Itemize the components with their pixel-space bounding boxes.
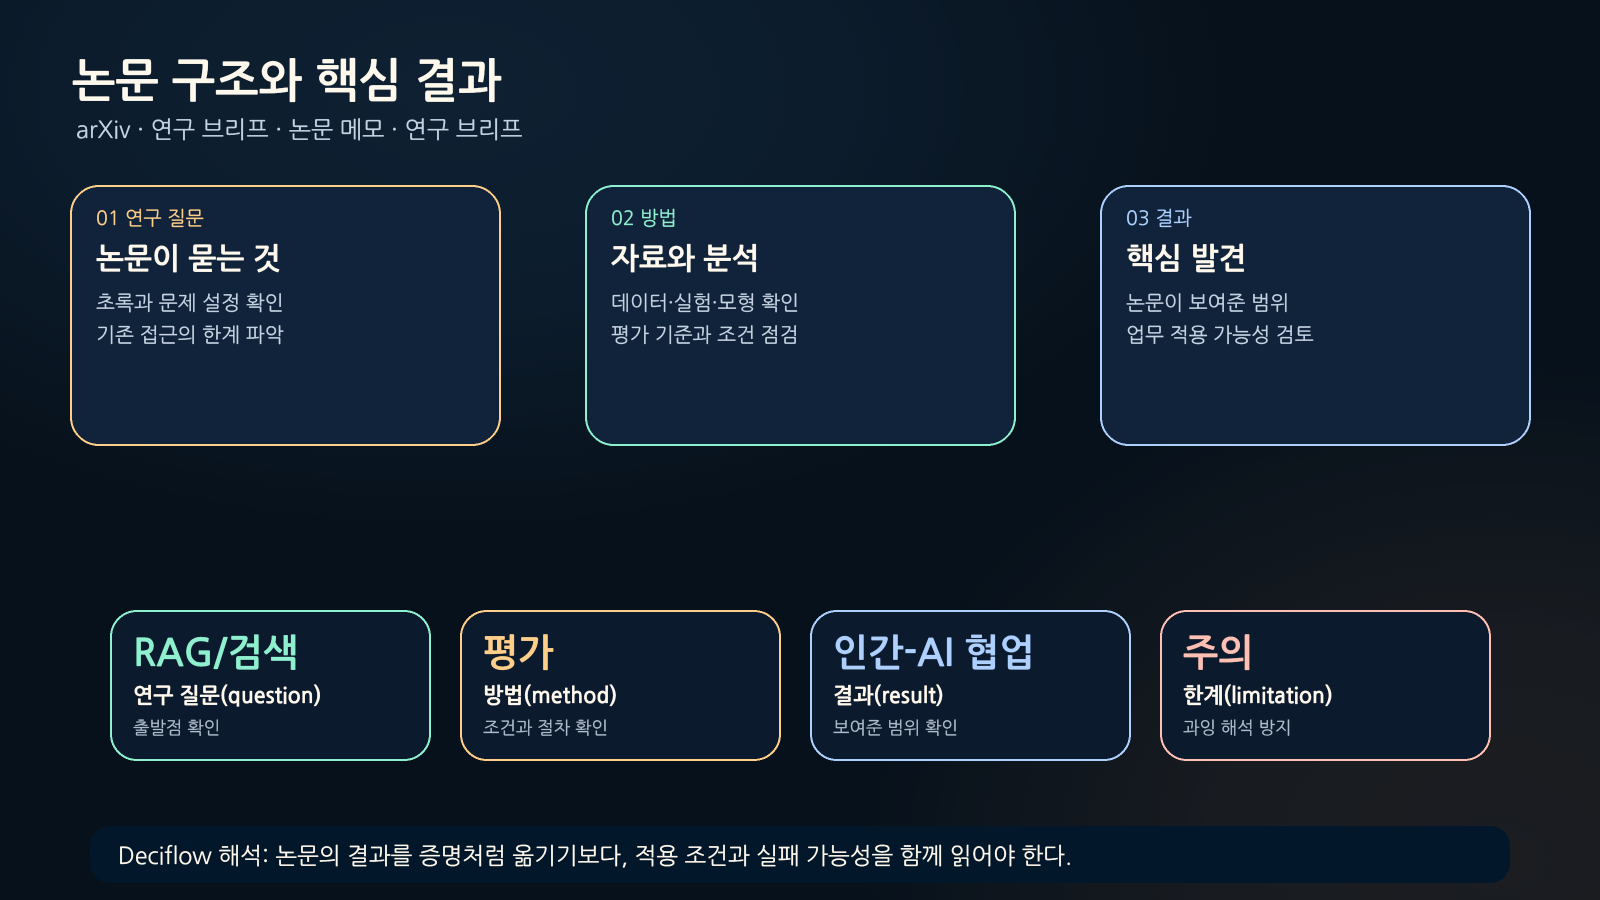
panel text: 업무 적용 가능성 검토 — [1126, 325, 1314, 345]
panel heading: 논문이 묻는 것 — [96, 245, 281, 274]
card heading: 평가 — [483, 634, 554, 672]
card note: 과잉 해석 방지 — [1183, 719, 1292, 737]
title: 논문 구조와 핵심 결과 — [72, 58, 502, 104]
card subheading: 연구 질문(question) — [133, 686, 321, 707]
panel text — [96, 293, 284, 345]
panel text: 기존 접근의 한계 파악 — [96, 325, 284, 345]
panel heading: 핵심 발견 — [1126, 245, 1246, 274]
card: evaluation — [460, 610, 781, 761]
panel label: 01 연구 질문 — [96, 208, 204, 228]
panel text — [611, 293, 799, 345]
card subheading: 결과(result) — [833, 686, 944, 707]
footer text: Deciflow 해석: 논문의 결과를 증명처럼 옮기기보다, 적용 조건과 실패 가능성을 함께 읽어야 한다. — [118, 845, 1072, 868]
card heading: 주의 — [1183, 634, 1254, 672]
panel label: 02 방법 — [611, 208, 677, 228]
panel text: 초록과 문제 설정 확인 — [96, 293, 284, 313]
panel text: 평가 기준과 조건 점검 — [611, 325, 799, 345]
panel text — [1126, 293, 1314, 345]
panel: research question — [70, 185, 501, 446]
card heading: 인간-AI 협업 — [833, 634, 1034, 672]
card subheading: 한계(limitation) — [1183, 686, 1333, 707]
panel label: 03 결과 — [1126, 208, 1192, 228]
subtitle: arXiv · 연구 브리프 · 논문 메모 · 연구 브리프 — [76, 119, 523, 142]
panel: result — [1100, 185, 1531, 446]
card subheading: 방법(method) — [483, 686, 617, 707]
panel: method — [585, 185, 1016, 446]
card heading: RAG/검색 — [133, 634, 298, 672]
card: RAG/search — [110, 610, 431, 761]
card: caution — [1160, 610, 1491, 761]
card note: 출발점 확인 — [133, 719, 220, 737]
card note: 조건과 절차 확인 — [483, 719, 608, 737]
footer callout — [90, 826, 1510, 883]
card note: 보여준 범위 확인 — [833, 719, 958, 737]
panel text: 논문이 보여준 범위 — [1126, 293, 1289, 313]
panel heading: 자료와 분석 — [611, 245, 759, 274]
card: human-AI collaboration — [810, 610, 1131, 761]
panel text: 데이터·실험·모형 확인 — [611, 293, 799, 313]
